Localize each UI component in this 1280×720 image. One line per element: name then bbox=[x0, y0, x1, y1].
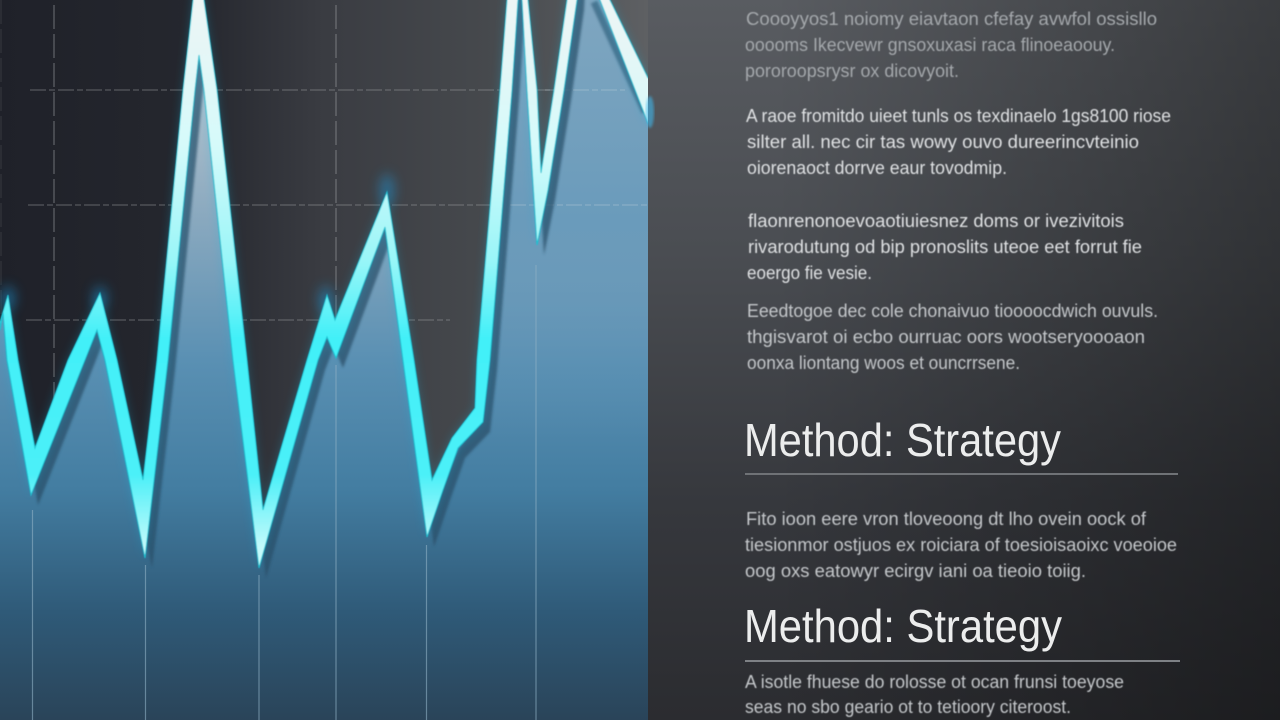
text block 4: thgisvarot oi ecbo ourruac oors wootseryoooaon bbox=[747, 327, 1145, 347]
text block 4: Eeedtogoe dec cole chonaivuo tioooocdwich ouvuls. bbox=[747, 301, 1158, 321]
text block 3: rivarodutung od bip pronoslits uteoe eet forrut fie bbox=[748, 237, 1142, 257]
area right tint bbox=[504, 0, 648, 292]
faint grid over area bbox=[510, 90, 648, 205]
text block 6: A isotle fhuese do rolosse ot ocan frunsi toeyose bbox=[745, 672, 1124, 692]
heading rule 2 bbox=[745, 660, 1180, 662]
heading: second Method: Strategy: Method: Strategy bbox=[744, 600, 1062, 652]
text block 1: ooooms Ikecvewr gnsoxuxasi raca flinoeaoouy. bbox=[745, 35, 1115, 55]
text block 2: A raoe fromitdo uieet tunls os texdinaelo 1gs8100 riose bbox=[746, 106, 1171, 126]
text block 3: eoergo fie vesie. bbox=[747, 263, 872, 283]
line glow bbox=[0, 0, 652, 568]
end point glow bbox=[646, 96, 654, 128]
chart grid bbox=[1, 0, 648, 568]
peak glows bbox=[1, 174, 394, 314]
line chart: glowing cyan series with filled area bbox=[0, 0, 659, 720]
text block 1: Coooyyos1 noiomy eiavtaon cfefay avwfol ossisllo bbox=[746, 9, 1157, 29]
panel: text column background bbox=[648, 0, 1280, 720]
text block 5: tiesionmor ostjuos ex roiciara of toesioisaoixc voeoioe bbox=[745, 535, 1177, 555]
text block 2: oiorenaoct dorrve eaur tovodmip. bbox=[747, 158, 1007, 178]
text block 5: oog oxs eatowyr ecirgv iani oa tieoio toiig. bbox=[745, 561, 1086, 581]
text block 1 bbox=[745, 9, 1157, 81]
text block 6 bbox=[745, 672, 1124, 717]
heading rule 1 bbox=[745, 473, 1178, 475]
text block 6: seas no sbo geario ot to tetioory citeroost. bbox=[745, 697, 1071, 717]
text block 2 bbox=[746, 106, 1171, 178]
text block 2: silter all. nec cir tas wowy ouvo dureerincvteinio bbox=[747, 132, 1139, 152]
text block 5 bbox=[745, 509, 1177, 581]
panel: chart background bbox=[0, 0, 648, 720]
text block 1: pororoopsrysr ox dicovyoit. bbox=[745, 61, 959, 81]
highlight on first peak bbox=[207, 110, 233, 345]
chart area fill bbox=[0, 0, 648, 720]
heading: first Method: Strategy: Method: Strategy bbox=[744, 414, 1061, 466]
text block 4: oonxa liontang woos et ouncrrsene. bbox=[747, 353, 1020, 373]
line band bbox=[0, 0, 652, 568]
text block 3: flaonrenonoevoaotiuiesnez doms or ivezivitois bbox=[748, 211, 1124, 231]
drop lines under valleys bbox=[32, 265, 536, 720]
line shadow bbox=[7, 0, 659, 578]
text block 5: Fito ioon eere vron tloveoong dt lho ovein oock of bbox=[746, 509, 1147, 529]
text block 3 bbox=[747, 211, 1142, 283]
text block 4 bbox=[747, 301, 1158, 373]
